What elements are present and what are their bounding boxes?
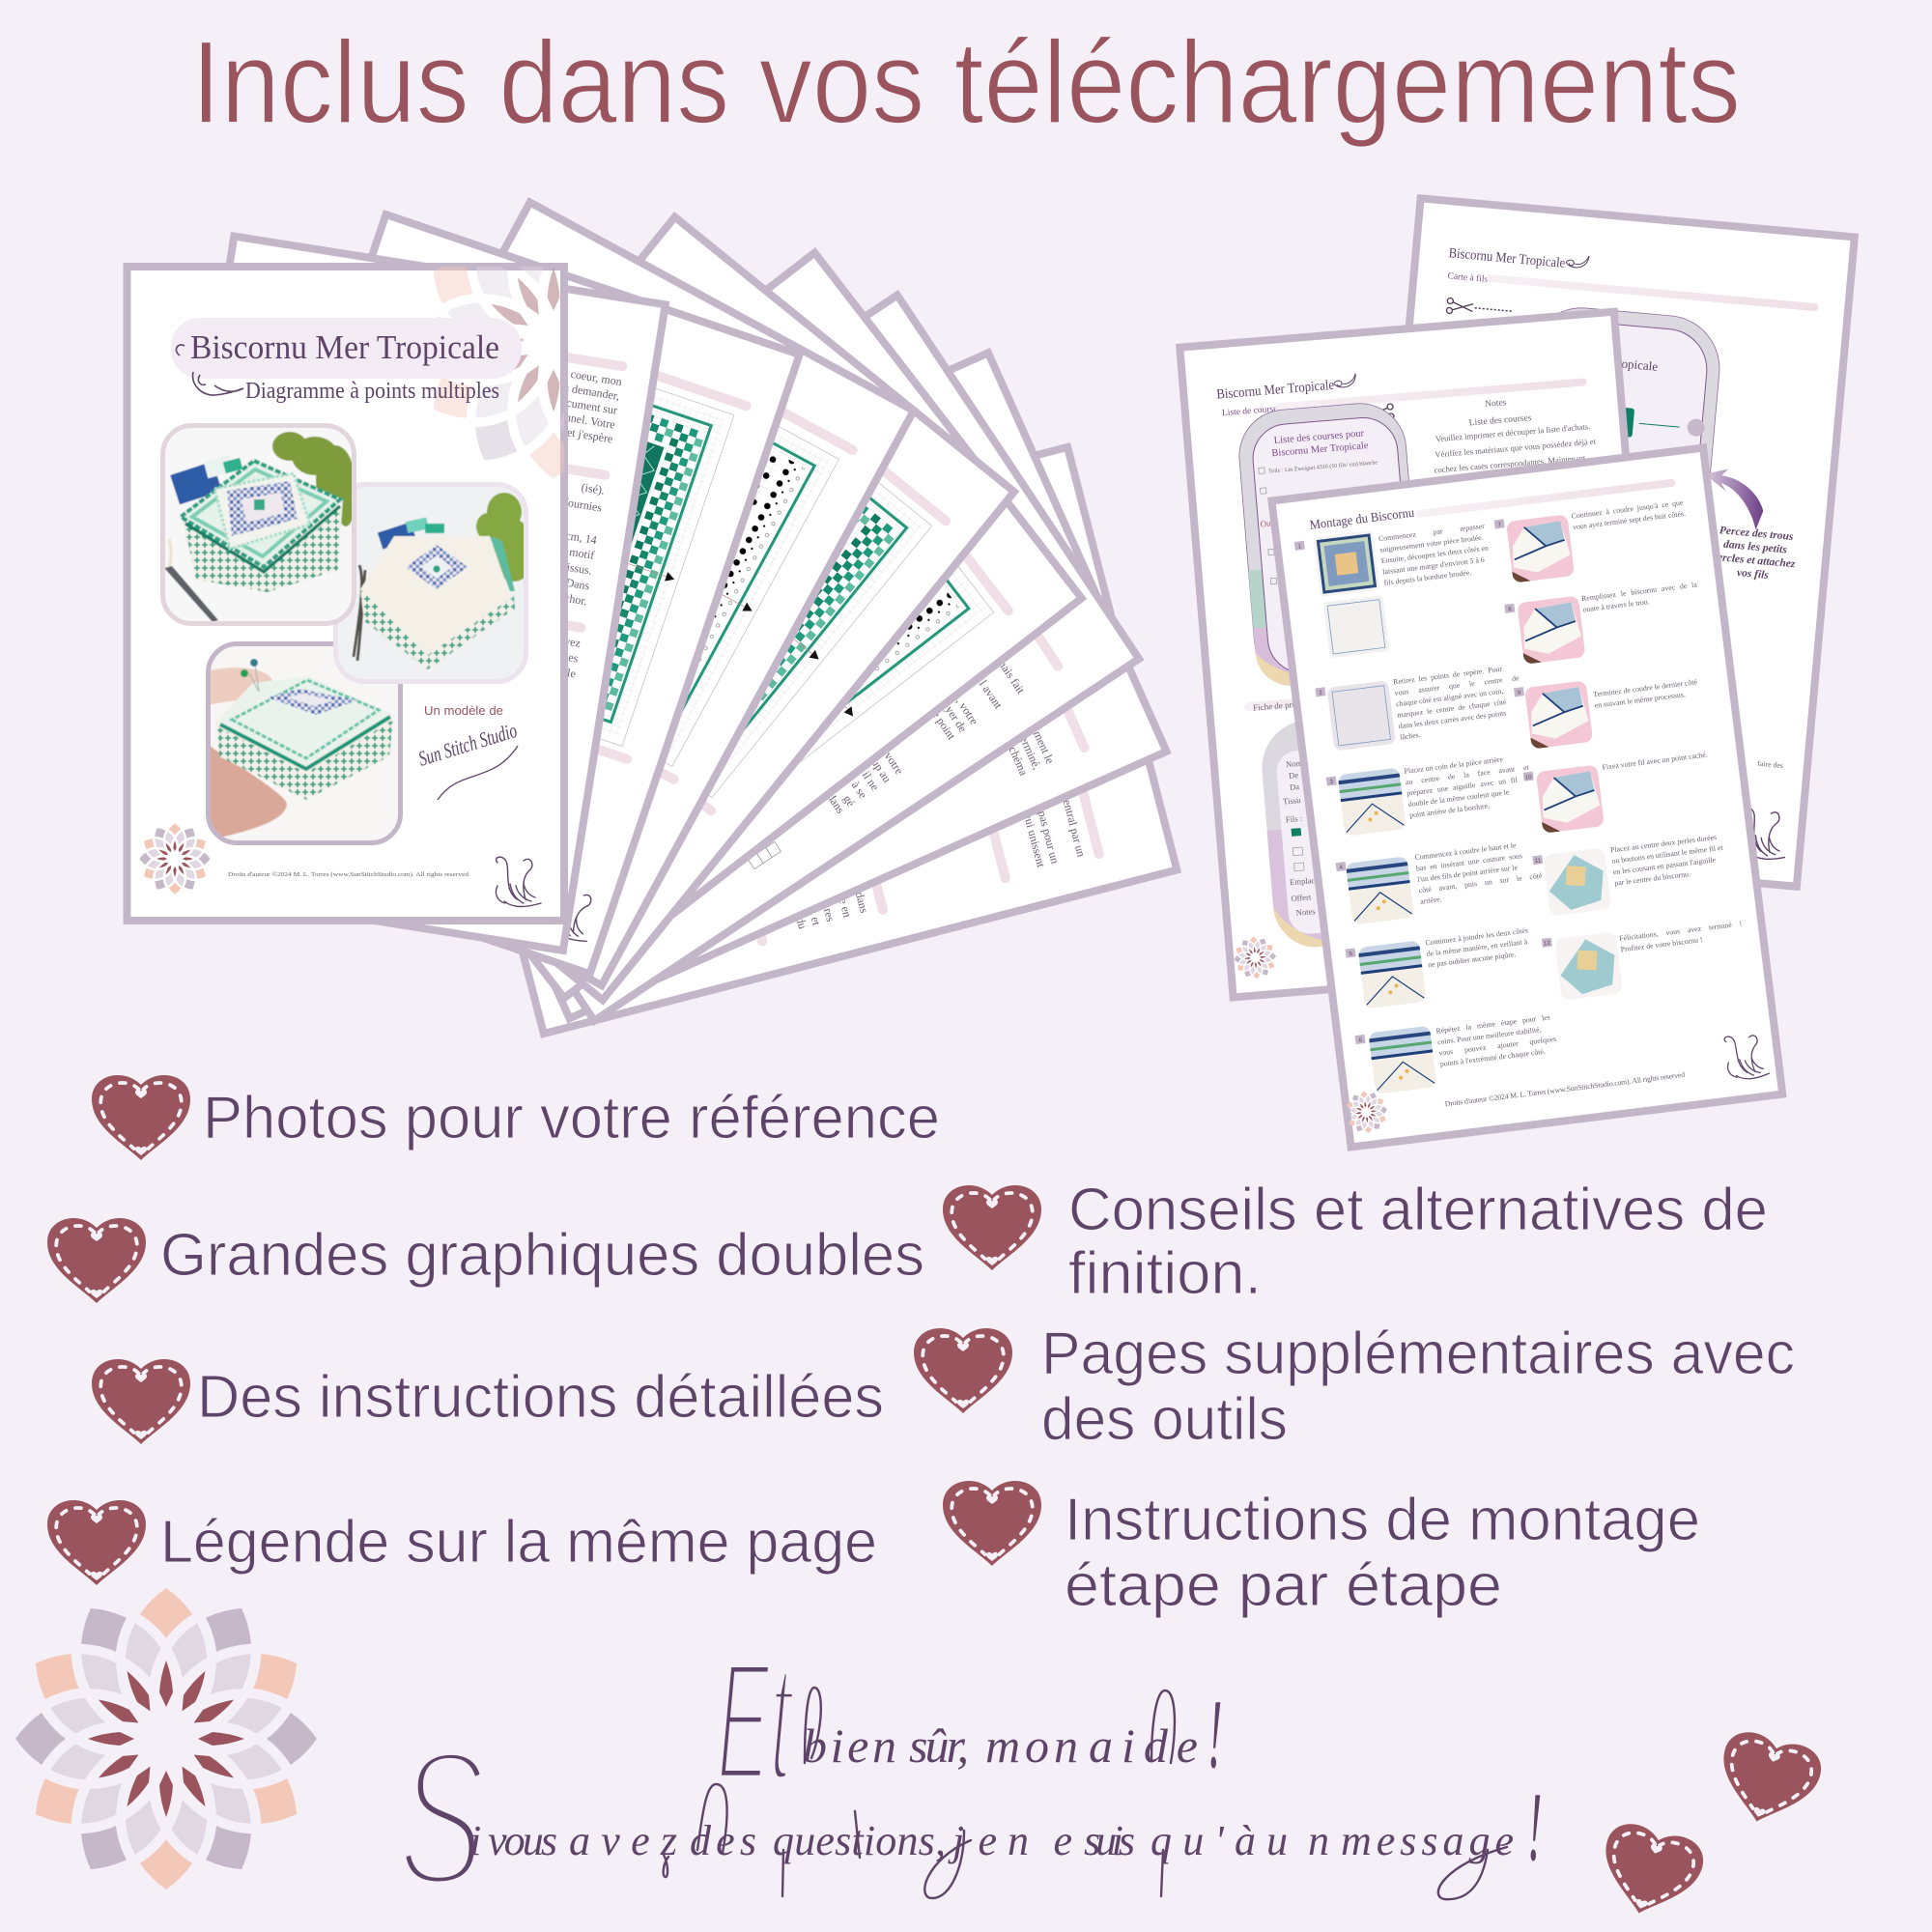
page: liste de courses: Liste de courses [1222,404,1282,418]
page 1: introduction text: . Dans [559,575,591,593]
page 6: instructions: tail avant [970,668,1006,712]
page 6: instructions: coup au [863,747,895,785]
page 1: introduction text: elle [558,665,577,680]
left column instructions: laissant une marge d'environ 5 à 6 [1382,555,1485,577]
page 7: instructions: ctement le [1025,717,1057,766]
step number tags: 3 [1329,780,1334,785]
page 8: instructions: s du [792,909,810,930]
shopping list card: Toile : Lin Zweigart 4316 (10 fils/ cm) blanche [1268,459,1378,475]
script message line 2: ne [1008,1817,1072,1864]
bullet: instructions de montage: Instructions de montage [1065,1487,1700,1553]
left column instructions: Placez un coin de la pièce arrière [1404,754,1504,776]
right column instructions [1567,497,1744,953]
left column instructions: bas en insérant une couture sous [1415,851,1522,873]
page 7: instructions [391,353,1167,1018]
left column instructions: coins. Pour une meilleure stabilité, [1436,1025,1542,1046]
step number tags: 12 [1544,941,1551,948]
page 6: instructions: s à se [845,773,870,801]
script message line 2: qu'à [1151,1817,1256,1864]
left column instructions: Continuez à joindre les deux côtés [1425,925,1528,947]
left column instructions: Répétez la même étape pour les [1435,1012,1550,1036]
corner swirl [496,857,541,906]
title: Inclus dans vos téléchargements [191,16,1741,148]
page 1: introduction text [131,237,666,951]
step number tags: 1 [1297,544,1302,550]
step number tags: 10 [1525,775,1533,781]
left column instructions: marquez le centre de chaque côté [1397,697,1507,720]
step number tags: 5 [1349,952,1353,957]
project sheet card: Emplacement [1290,873,1336,887]
page 2: green chart [176,214,800,974]
page: carte à fils: dans les petits [1723,539,1788,555]
page: carte à fils: Carte à fils [1447,270,1489,285]
step number tags: 9 [1518,690,1521,696]
script message line 2: vous [488,1817,557,1864]
bullet: pages supplémentaires [914,1321,1795,1453]
left column instructions: double de la même couleur que le [1407,787,1510,809]
panel: fan of pattern pages [128,201,1177,1034]
project sheet card: Da [1290,781,1300,792]
script message line 2: questions, [773,1817,946,1864]
bullet: grandes graphiques doubles [47,1218,924,1303]
page 6: instructions: ce point [926,704,959,743]
panel: extra pages stack [1179,198,1855,1148]
photo 2: biscornu back side [336,485,535,682]
designer signature: Sun Stitch Studio [415,718,520,771]
notes column: Notes [1485,398,1507,410]
left column instructions: l'un des fils de point arrière sur le [1417,863,1519,884]
left column instructions: points à l'extrémité de chaque côté. [1439,1047,1546,1068]
page 6: instructions: , il ne [857,764,882,793]
page: carte à fils: vos fils [1736,567,1770,582]
page: carte à fils [1363,198,1855,887]
page 8: instructions [435,447,1177,1034]
page 8: instructions: ion central par un [1055,776,1088,858]
page 7: instructions: schéma [1004,740,1031,778]
icon: large mandala [15,1588,317,1889]
page 5: dots chart [298,253,1082,998]
project sheet card: Tissu [1283,795,1302,806]
faded mandala [433,267,564,479]
page: carte à fils: Biscornu Mer Tropicale [1448,245,1566,271]
page: montage du biscornu [1270,448,1782,1148]
left column instructions [1376,520,1566,1068]
cover title [171,318,522,404]
script message line 1: aide [1089,1719,1198,1773]
bullet: conseils et alternatives [943,1177,1768,1307]
left column instructions: côté avant, puis un sur le côté [1418,871,1543,895]
project sheet card [1244,687,1460,952]
right column instructions: ou boutons en utilisant le même fil et [1611,843,1724,866]
bullet: conseils et alternatives: Conseils et alternatives de [1068,1177,1768,1243]
page: montage du biscornu: Montage du Biscornu [1309,505,1415,532]
bullet: pages supplémentaires: des outils [1041,1386,1288,1453]
script message line 1: bien [803,1719,896,1773]
bullet: des instructions détaillées: Des instructions détaillées [197,1364,884,1431]
icon: tilted heart right [1709,1726,1827,1834]
left column instructions: Commencez à coudre le haut et le [1414,840,1517,862]
page 8: instructions: ircs qui unissent [1016,792,1048,869]
left column instructions: dans les deux carrés avec des points [1398,709,1507,730]
footer: Droits d'auteur ©2024 M. L. Torres (www.SunStitchStudio.com). All rights reserved [1444,1070,1686,1108]
right column instructions: Continuez à coudre jusqu'à ce que [1571,498,1684,521]
page 1: introduction text: le motif [557,543,595,562]
page 1: introduction text: avez [558,633,582,650]
project sheet card: Fils : [1285,813,1303,824]
project sheet card: Offert [1291,892,1312,903]
photo 3: biscornu held in hand [207,643,400,842]
step photo 1 [1313,530,1389,659]
designer signature [415,703,520,800]
right column instructions: ouate à travers le trou. [1582,597,1650,614]
panel: cover page [124,263,568,924]
step photos 3 to 6 [1335,767,1438,1094]
page 1: introduction text: vous demander, [547,378,620,403]
page 6: instructions [353,296,1139,1021]
page 6: instructions: nt, votre [949,688,981,727]
shopping list card: Ou [1260,519,1271,528]
left column instructions: chaque côté est aligné avec un coin, [1396,687,1504,708]
left column instructions: lâches. [1400,730,1421,742]
page: carte à fils: Percez des trous [1719,525,1794,543]
page 6: instructions: essayer de [932,687,970,734]
script message line 2: je [948,1817,997,1864]
cover title: Biscornu Mer Tropicale [190,328,499,366]
page 1: introduction text: ce document sur [541,392,618,417]
page: carte à fils: faire des [1757,759,1783,770]
script message line 1 [717,1626,1222,1815]
page 3: dots chart [218,202,914,985]
bullet: légende sur la même page [47,1500,877,1585]
right column instructions: Remplissez le biscornu avec de la [1581,580,1698,603]
script message line 2: avez [569,1817,677,1864]
right column instructions: en les cousant en passant l'aiguille [1612,855,1717,876]
project sheet card: Nom [1286,758,1303,769]
page 8: instructions: nais pas pour un [1030,788,1062,865]
bullet: pages supplémentaires: Pages supplémentaires avec [1041,1321,1795,1387]
bullet: photos pour votre référence: Photos pour votre référence [203,1085,940,1151]
left column instructions: fils depuis la bordure brodée. [1383,568,1472,587]
project sheet card: De [1289,770,1299,781]
cover title: Diagramme à points multiples [245,379,499,404]
page 8: instructions: es, et [805,900,824,927]
bullet: photos pour votre référence [92,1075,940,1160]
small mandala logo [139,823,211,895]
page 1: introduction text: les [564,650,580,666]
left column instructions: préparez une aiguille avec un fil [1406,776,1519,798]
script message line 2: message [1341,1817,1514,1864]
page: carte à fils: Tropicale [1609,355,1659,374]
left column instructions: ne pas oublier aucune piqûre. [1428,950,1517,969]
page 7: instructions: terminé, [1016,731,1044,772]
step photos 7 to 12 [1502,514,1627,1001]
page 6: instructions: à votre [877,743,906,777]
notes column: Veuillez imprimer et découper la liste d'achats. [1435,421,1591,443]
script message line 2: S [398,1711,486,1926]
page 1: introduction text: personnel. Votre [539,407,616,432]
script message line 1: Et [717,1626,794,1815]
project sheet card: Notes [1295,906,1317,918]
page 1: introduction text: projet, et j'espère [533,420,613,445]
step number tags: 7 [1497,523,1502,528]
footer text: Droits d'auteur ©2024 M. L. Torres (www.SunStitchStudio.com). All rights reserved [228,871,469,878]
step photo 2 [1326,680,1396,751]
page 6: instructions: jamais fait [989,647,1028,696]
page 8: instructions: que en [834,886,854,919]
step number tags: 2 [1319,691,1323,696]
bullet: instructions de montage [943,1481,1700,1619]
right column instructions: vous ayez terminé sept des huit côtés. [1573,509,1686,531]
page 1: introduction text: (isé). [581,480,606,497]
step number tags: 11 [1535,858,1542,865]
script message line 1: mon [985,1719,1078,1773]
arrow and note [1700,468,1767,530]
step number tags [1294,516,1565,1044]
script message line 1: sûr, [909,1719,969,1773]
page 4: green chart [264,217,1014,1000]
icon: tilted heart left [1591,1818,1709,1926]
left column instructions: point arrière de la bordure. [1409,801,1491,819]
bullet: conseils et alternatives: finition. [1068,1240,1262,1307]
left column instructions: Retirez les points de repère. Pour [1393,665,1503,687]
page 1: introduction text: et fournies [553,494,603,515]
shopping list card [1236,400,1425,688]
page 6: instructions: dans [824,791,847,816]
left column instructions: soigneusement votre pièce brodée. [1379,533,1484,554]
script message line 1: ! [1208,1681,1222,1789]
left column instructions: de la même manière, en veillant à [1426,937,1528,958]
page: carte à fils: cercles et attachez [1712,552,1796,570]
right column instructions: Profitez de votre biscornu ! [1620,935,1703,953]
left column instructions: vous assurer que le centre de [1394,673,1520,697]
script message line 2: ! [1527,1774,1542,1882]
left column instructions: Commencez par repasser [1378,522,1486,543]
notes column [1429,391,1598,474]
script message line 2: suis [1084,1817,1135,1864]
notes column: cochez les cases correspondantes. Maintenant, [1434,452,1588,474]
script message line 2: un [1266,1817,1329,1864]
bullet: des instructions détaillées [92,1359,884,1444]
left column instructions: Ensuite, découpez les deux côtés en [1380,544,1489,565]
page 8: instructions: es dans [850,878,871,915]
right column instructions: Terminez de coudre le dernier côté [1593,677,1698,698]
page 1: introduction text: tissus. [562,559,593,578]
photo 1: biscornu front side [162,425,355,624]
step number tags: 6 [1358,1037,1363,1044]
bullet: instructions de montage: étape par étape [1065,1552,1502,1619]
step number tags: 4 [1339,865,1344,871]
notes column: Vérifiez les matériaux que vous possédez déjà et [1435,437,1597,459]
script message line 2: des [690,1817,756,1864]
page 6: instructions: gé [840,792,858,809]
bullet: légende sur la même page: Légende sur la même page [160,1509,877,1576]
bullet: grandes graphiques doubles: Grandes graphiques doubles [160,1222,924,1289]
left column instructions: arrière. [1420,895,1442,906]
right column instructions: par le centre du biscornu. [1614,869,1690,888]
designer signature: Un modèle de [424,703,503,718]
page 1: introduction text: Anchor. [550,588,588,608]
shopping list card: Liste des courses pour [1273,428,1365,446]
step number tags: 8 [1508,607,1513,612]
page 8: instructions: ures [819,901,838,923]
project sheet card: Fiche de projet [1253,698,1306,713]
notes column: Liste des courses [1468,413,1532,428]
left column instructions: vous pouvez ajouter quelques [1438,1035,1557,1058]
script message line 2 [398,1711,1542,1926]
page 1: introduction text: Merci de tout mon coeur, mon [482,354,623,388]
page 1: introduction text: /cm, 14 [561,528,598,547]
page: liste de courses [1179,312,1667,997]
right column instructions: en suivant le même processus. [1594,690,1686,710]
right column instructions: Placez au centre deux perles dorées [1610,833,1717,854]
right column instructions: Fixez votre fil avec un point caché. [1602,750,1708,772]
left column instructions: au centre de la face avant et [1405,763,1530,786]
shopping list card: Biscornu Mer Tropicale [1271,440,1369,459]
right column instructions: Félicitations, vous avez terminé ! [1619,919,1743,943]
page: liste de courses: Biscornu Mer Tropicale [1216,378,1335,403]
script message line 2: i [469,1817,481,1864]
